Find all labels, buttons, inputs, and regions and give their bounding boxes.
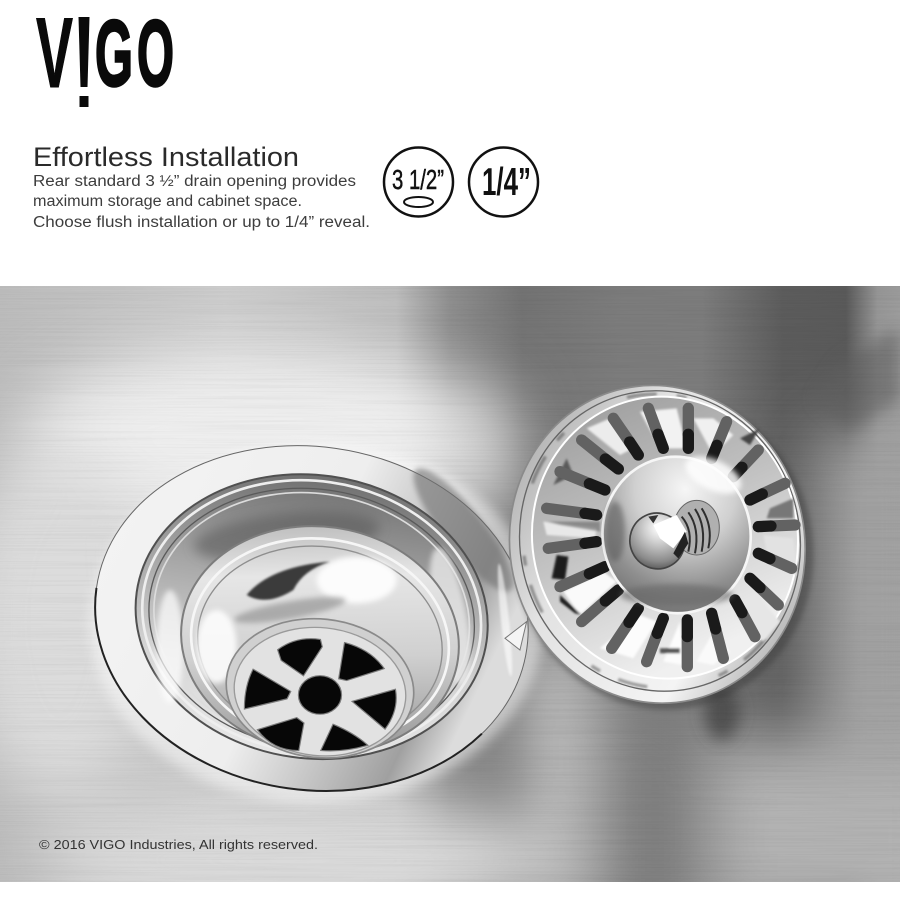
grate holes (245, 639, 396, 750)
copyright: © 2016 VIGO Industries, All rights reserved. (39, 837, 318, 852)
description text: maximum storage and cabinet space. (33, 193, 302, 210)
drain grate (225, 618, 414, 759)
description text (33, 173, 370, 231)
strainer shadow (514, 432, 815, 712)
sink drain (88, 445, 546, 806)
logo: VIGO: V (36, 0, 73, 108)
strainer centre cap (601, 453, 752, 614)
dish reflections (543, 408, 797, 665)
strainer knob (628, 500, 720, 570)
strainer rim (508, 384, 806, 704)
brushed steel background (0, 286, 900, 900)
basket strainer (508, 384, 815, 712)
logo: VIGO: G (95, 0, 133, 106)
heading: Effortless Installation (33, 142, 299, 172)
logo: VIGO (36, 0, 174, 108)
panel: sink drain photo (0, 286, 900, 900)
inner dome (180, 525, 460, 748)
heading and description (33, 142, 370, 231)
description text: Choose flush installation or up to 1/4” reveal. (33, 214, 370, 231)
icon: 1/4 inch reveal: 1/4” (482, 161, 531, 204)
icon: 3 1/2 inch drain opening: 3 1/2” (392, 164, 444, 195)
icon: 1/4 inch reveal (469, 148, 538, 216)
drain flange (88, 445, 546, 806)
drain bowl (134, 473, 489, 760)
strainer slots (547, 408, 795, 667)
icon: 3 1/2 inch drain opening (384, 148, 453, 216)
description text: Rear standard 3 ½” drain opening provides (33, 173, 356, 190)
logo: VIGO: O (137, 0, 174, 106)
